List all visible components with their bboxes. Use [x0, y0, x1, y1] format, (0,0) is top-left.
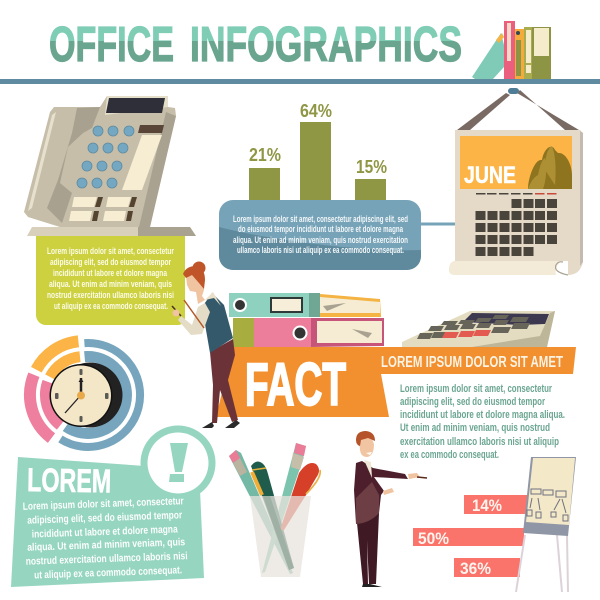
- connector: [420, 222, 456, 226]
- title: OFFICE: [49, 18, 174, 72]
- icon: pencil cup: [229, 443, 320, 577]
- panel: yellow text: aliqua. Ut enim ad minim veniam, quis: [49, 279, 172, 289]
- chart: percentage bars on flipchart: [413, 495, 528, 578]
- text block: fact body: [400, 383, 565, 461]
- bar chart: [249, 101, 387, 201]
- figure: presenting man: [354, 431, 427, 587]
- chart: percentage bars on flipchart: 36%: [460, 559, 491, 578]
- panel: yellow text: nostrud exercitation ullamco laboris nisi: [47, 290, 174, 300]
- banner: fact: FACT: [245, 351, 346, 418]
- icon: books: [472, 21, 551, 79]
- title: INFOGRAPHICS: [190, 18, 462, 72]
- panel: yellow text: [36, 236, 185, 325]
- icon: flipchart: [516, 457, 576, 592]
- text block: fact body: Ut enim ad minim veniam, quis nostrud: [400, 422, 550, 434]
- shelf: [0, 79, 600, 84]
- bar chart: 21%: [249, 145, 281, 165]
- text block: lorem body: Lorem ipsum dolor sit amet, consectetur: [23, 495, 184, 513]
- text block: lorem body: incididunt ut labore et dolore magna: [32, 523, 178, 541]
- panel: blue text: aliqua. Ut enim ad minim veniam, quis nostrud exercitation: [233, 235, 408, 245]
- banner: fact: [216, 347, 576, 418]
- chart: clock donut: [30, 341, 140, 447]
- text block: lorem body: nostrud exercitation ullamco laboris nisi: [26, 550, 188, 568]
- icon: exclamation mark: [169, 443, 188, 482]
- bar chart: 64%: [300, 101, 332, 121]
- figure: woman writing: [172, 262, 240, 428]
- text block: lorem body: adipiscing elit, sed do eiusmod tempor: [27, 509, 182, 527]
- text block: lorem body: [23, 495, 188, 582]
- panel: lorem callout: [11, 426, 216, 587]
- bar chart: 15%: [356, 157, 387, 177]
- icon: wall calendar: [449, 88, 583, 275]
- panel: yellow text: Lorem ipsum dolor sit amet, consectetur: [47, 246, 174, 256]
- icon: stacked folders: [229, 293, 384, 347]
- text block: lorem body: aliqua. Ut enim ad minim veniam, quis: [27, 536, 185, 554]
- heading: lorem: LOREM: [27, 461, 112, 499]
- icon: desk phone: [24, 96, 196, 236]
- text block: fact body: ex ea commodo consequat.: [400, 449, 499, 461]
- panel: blue text: Lorem ipsum dolor sit amet, consectetur adipiscing elit, sed: [233, 214, 408, 224]
- title: [49, 18, 462, 72]
- panel: yellow text: ut aliquip ex ea commodo consequat.: [54, 301, 168, 311]
- panel: blue text: [219, 200, 421, 270]
- chart: percentage bars on flipchart: 50%: [418, 529, 449, 548]
- icon: calculator: [402, 311, 555, 347]
- panel: blue text: do eiusmod tempor incididunt ut labore et dolore magna: [238, 224, 404, 234]
- panel: yellow text: adipiscing elit, sed do eiusmod tempor: [50, 257, 171, 267]
- text block: fact body: adipiscing elit, sed do eiusmod tempor: [400, 396, 546, 408]
- icon: wall calendar: JUNE: [464, 162, 516, 189]
- chart: percentage bars on flipchart: 14%: [472, 496, 502, 515]
- text block: lorem body: ut aliquip ex ea commodo consequat.: [34, 564, 182, 581]
- panel: blue text: ullamco laboris nisi ut aliquip ex ea commodo consequat.: [237, 245, 404, 255]
- panel: yellow text: incididunt ut labore et dolore magna: [53, 268, 168, 278]
